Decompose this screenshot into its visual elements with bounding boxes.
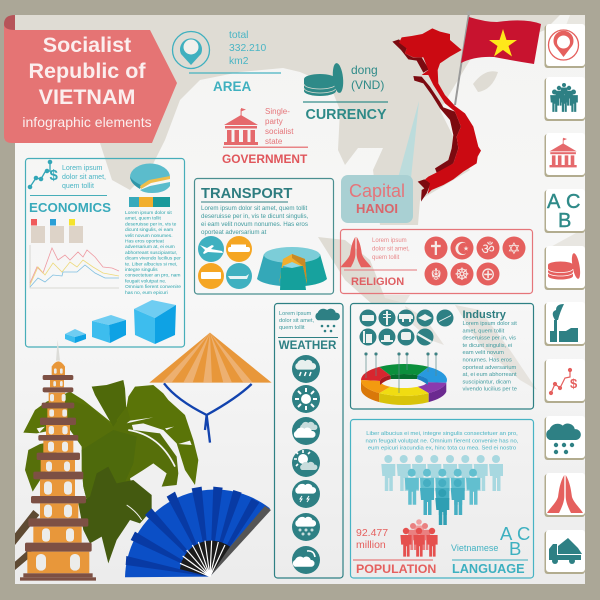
flag cloth [461,17,541,64]
economics intro [62,165,106,190]
weather text: Lorem ipsum [279,311,312,317]
sidebar card: factory [544,302,585,346]
banner heading: infographic elements [22,114,152,130]
currency heading: CURRENCY [306,107,387,123]
population value: 92.477 [356,527,388,539]
sidebar card: language: A [547,191,561,213]
industry text: amet, quem tollit [462,328,505,334]
line chart [30,245,119,288]
government text: party [265,117,283,126]
sidebar card: rain [544,416,585,460]
transport heading: TRANSPORT [201,186,292,202]
sidebar icons [544,24,585,574]
economics body text: amet, quem tollit [125,216,162,222]
economics body text: dicunt singulis, ei eam [125,227,173,233]
banner heading: Republic of [28,59,146,83]
religion symbols: ⊕ [480,264,496,285]
economics body text: adversarium at, ei eum [125,244,175,250]
language letters: C [517,523,530,544]
government text: socialist [265,127,294,136]
transport text: oporteat adversarium at [201,229,267,236]
government text: state [265,137,283,146]
icon: praying hands [341,237,371,267]
icon: 3D pie chart [129,164,170,207]
flag star [489,29,517,56]
icon: government building [224,108,258,145]
capital label: Capital [349,181,405,201]
flag of Vietnam [455,11,541,105]
transport text [201,205,309,236]
religion symbols: ☸ [454,265,470,285]
religion symbols: ✝ [428,238,444,260]
economics body text: consectetuer an pro, nam [125,273,180,279]
legend [31,219,83,243]
panel: religion [340,230,532,294]
government block [222,107,308,166]
icon: map pin [172,32,210,68]
language letters [500,523,530,559]
icon: dollar sign: $ [50,167,58,184]
icon: train [226,236,252,262]
area value: total [229,30,248,41]
religion text: quem tollit [372,255,400,261]
industry text: vivendo lucilius per te [462,387,517,393]
icon: heavy rain [292,355,320,383]
transport text: ei eam velit novum nonumes. Has eros [201,221,308,228]
industry text: te dicunt singulis, ei [462,343,512,349]
illustration: conical hat [149,333,272,443]
sidebar card: coins [544,246,585,290]
illustration: blue fan [125,487,271,577]
3D cube bars [65,300,176,344]
icon: ship [226,263,252,289]
icon: rising chart [28,160,52,189]
weather text: quem tollit [279,325,305,331]
icon: rain cloud [315,309,340,332]
sidebar card: prayer [544,473,585,517]
banner heading [22,33,152,130]
banner curl [4,15,15,30]
3D chart [257,247,327,290]
population text: Liber albucius ei mei, integre singulis consectetuer an pro, [366,431,518,437]
transport text: deseruisse per in, vis te dicunt singulis, [201,213,309,220]
panel: industry [350,304,534,409]
map of Vietnam [392,28,481,202]
weather text [279,311,315,331]
chart pins [365,353,437,393]
sidebar card: finance: $ [570,376,578,391]
icon: truck [198,263,224,289]
population value: million [356,539,386,551]
icon: sun [292,385,320,413]
religion symbols [424,236,526,286]
sidebar card: truck [544,530,585,574]
economics body text: Lorem ipsum dolor sit [125,210,172,216]
illustration: pagoda tower [20,340,96,581]
population text [366,431,519,452]
icon: wind cloud [292,546,320,574]
industry text: suscipiantur, dicam [462,379,511,385]
population text: eum epicuri iracundia ex, hinc tota cu mea. Sed ei nostro [368,446,517,452]
industry text: nonumes. Has eros [462,358,512,364]
economics body text: te. Liber albucius si mei, [125,261,177,267]
government text: Single- [265,107,290,116]
population text: nam feugait volutpat ne. Omnium fierent convenire has no, [366,438,519,444]
industry text: deseruisse per in, vis [462,336,516,342]
language value: Vietnamese [451,543,498,553]
icon: red people [400,519,438,557]
sidebar card: people [544,77,585,121]
language heading: LANGUAGE [452,562,525,576]
economics body text: integre singulis [125,267,158,273]
government text [265,107,294,146]
industry text: at, ei eum abhorreant [462,372,517,378]
government heading: GOVERNMENT [222,152,308,166]
industry text: eam velit novum [462,350,504,356]
currency value [351,63,384,92]
city name: HANOI [356,201,398,216]
icon: cloudy [292,417,320,445]
industry text [462,321,517,393]
economics body text: dicam vivendo lucilius per [125,256,181,262]
language letters: B [509,538,521,559]
sidebar card: pin [544,24,585,68]
religion text: Lorem ipsum [372,238,407,244]
sidebar card: finance [544,359,585,403]
banner heading: VIETNAM [39,85,135,109]
economics intro: Lorem ipsum [62,165,103,172]
population value [356,527,388,551]
economics body text: velit novum nonumes. [125,233,173,239]
illustration: palm trees [15,380,198,570]
panel: weather [274,304,343,578]
religion symbols: ॐ [481,240,495,258]
economics intro: quem tollit [62,183,94,190]
sidebar card: language [544,189,585,233]
panel: transport [194,178,334,294]
language letters: A [500,523,513,544]
icon: plane [198,236,224,262]
weather text: dolor sit amet, [279,318,315,324]
flag pole [455,11,471,105]
economics body text: Omnium fierent convenire [125,284,181,290]
economics intro: dolor sit amet, [62,174,106,181]
population heading: POPULATION [356,562,436,576]
icon: snow [292,513,320,541]
capital callout [341,101,419,223]
people pyramid [381,455,503,525]
industry heading: Industry [462,309,507,321]
currency value: dong [351,63,378,77]
icon: sun and cloud [292,449,320,477]
sidebar card: language: C [566,191,580,213]
religion symbols: ☪ [454,239,470,260]
industry icons [360,310,454,346]
sidebar card: language: B [558,210,571,232]
banner body [4,24,177,143]
religion symbols: ✡ [507,239,521,258]
industry text: oporteat adversarium [462,365,517,371]
currency block [303,63,388,123]
icon: coins [304,63,345,96]
industry text: Lorem ipsum dolor sit [462,321,517,327]
icon: thunderstorm [292,480,320,508]
banner heading: Socialist [43,33,131,57]
background world map [15,15,585,390]
area value: 332.210 [229,43,266,54]
economics body text: feugait volutpat ne. [125,278,166,284]
area value: km2 [229,56,249,67]
religion text: dolor sit amet, [372,246,410,252]
title banner [4,15,177,143]
religion text [372,238,410,261]
economics body text: deseruisse per in, vis te [125,221,177,227]
area block [172,30,281,94]
economics heading: ECONOMICS [29,200,111,215]
weather heading: WEATHER [279,339,337,352]
transport text: Lorem ipsum dolor sit amet, quem tollit [201,205,308,212]
economics body text: abhorreant suscipiantur, [125,250,177,256]
economics body text [125,210,181,296]
panel: population and language [350,420,534,578]
area heading: AREA [213,79,252,94]
religion symbols: ☬ [430,265,442,284]
donut chart [361,364,447,405]
sidebar card: government [544,133,585,177]
economics body text: has no, eum epicuri [125,290,168,296]
panel: economics [26,158,184,347]
religion heading: RELIGION [351,276,404,288]
currency value: (VND) [351,78,384,92]
area value [229,30,266,67]
economics body text: Has eros oporteat [125,238,165,244]
